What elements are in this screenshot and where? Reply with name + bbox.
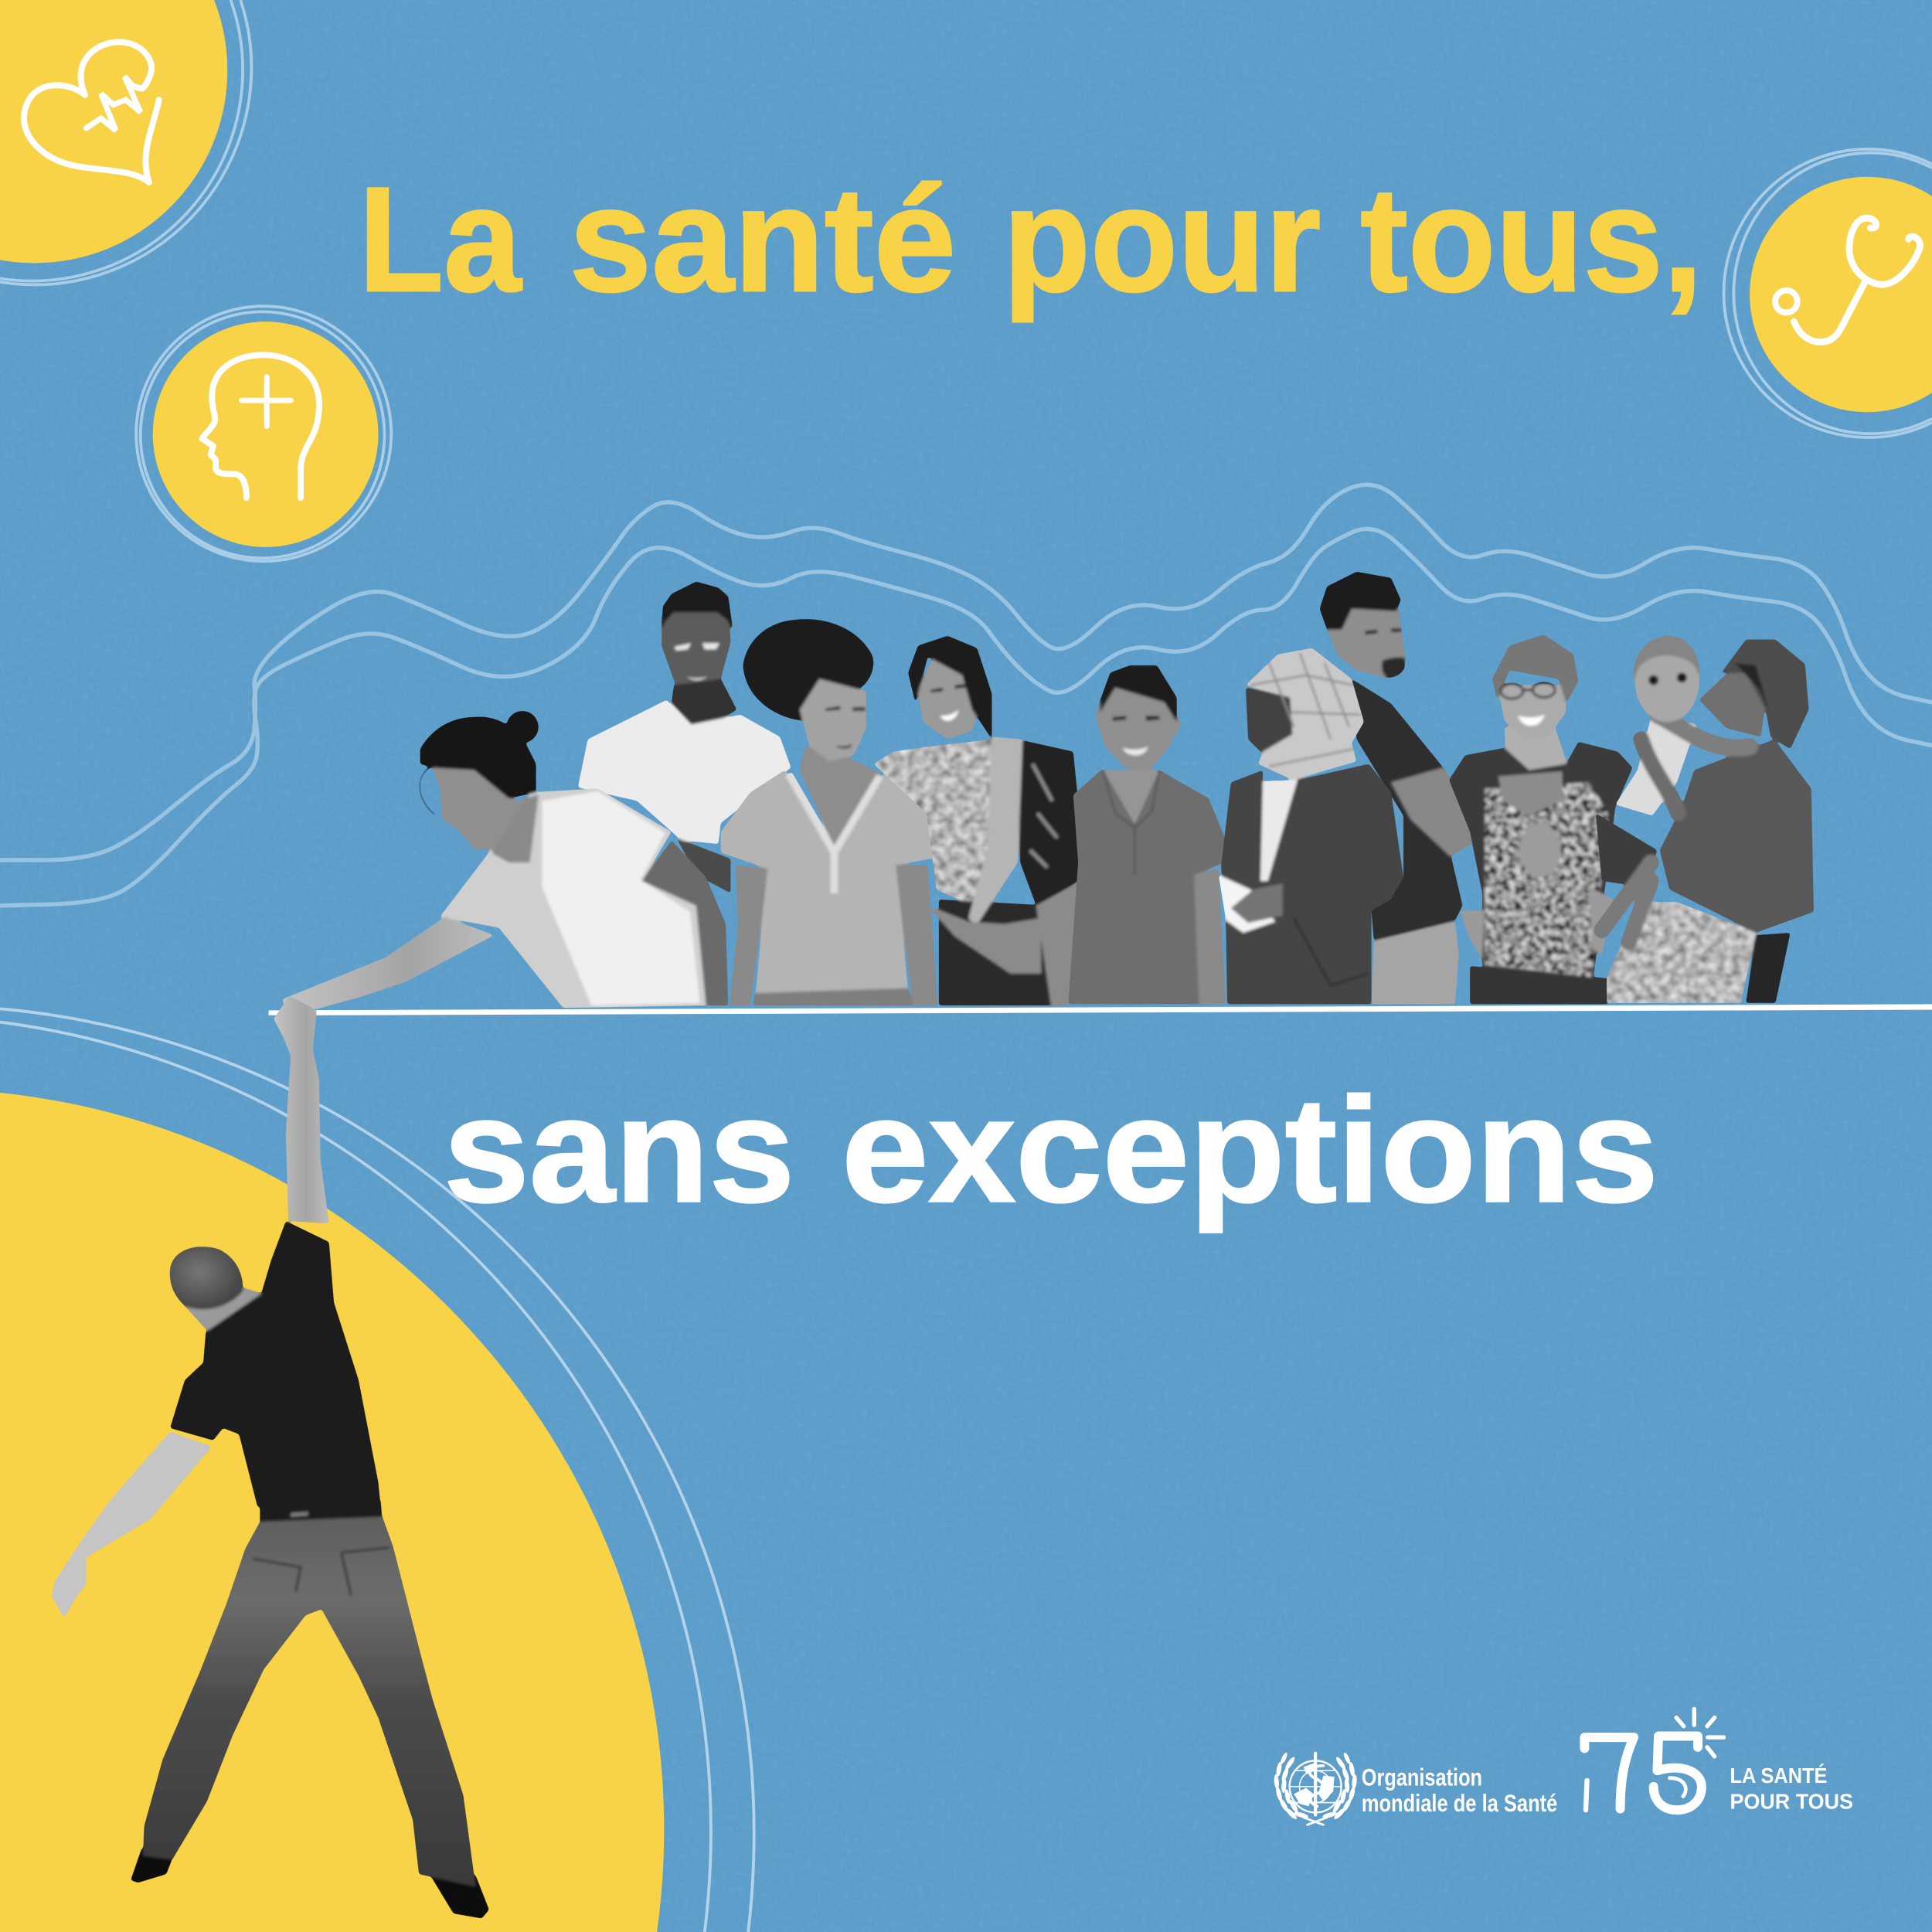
icon badge: stethoscope bbox=[1724, 149, 1932, 437]
logo text: La santé pour tous: LA SANTÉ bbox=[1730, 1764, 1827, 1787]
ledge: white line bbox=[269, 1004, 1932, 1015]
title: first line: pour bbox=[1003, 155, 1321, 322]
title: first line: santé bbox=[570, 155, 956, 322]
person: young woman with curly hair bbox=[721, 619, 945, 1005]
wavy line: upper bbox=[0, 485, 1932, 860]
person: man with arms crossed bbox=[1320, 572, 1480, 1004]
person: man hanging from the ledge bbox=[52, 995, 489, 1918]
person: woman in headscarf and blazer bbox=[1219, 648, 1403, 1004]
person: man leaning forward bbox=[282, 711, 728, 1010]
wavy line: lower bbox=[0, 529, 1932, 906]
icon badge: broken heart bbox=[0, 0, 251, 284]
logo text: Organisation mondiale de la Santé: mondiale de la Santé bbox=[1362, 1790, 1557, 1817]
logo text: La santé pour tous: POUR TOUS bbox=[1730, 1790, 1853, 1814]
logo: 75 with rays bbox=[1584, 1709, 1724, 1810]
title: second line: exceptions bbox=[842, 1066, 1658, 1233]
person: man in white T-shirt at the back bbox=[578, 582, 791, 893]
person: mother holding a baby bbox=[1596, 636, 1814, 1003]
icon badge: mental health head bbox=[136, 306, 391, 561]
person: older woman with glasses bbox=[1449, 634, 1633, 1004]
title: second line: sans bbox=[444, 1066, 794, 1233]
person: woman in patterned clothing with sash bbox=[873, 636, 1086, 1005]
title: first line: tous, bbox=[1360, 155, 1702, 322]
logo text: Organisation mondiale de la Santé: Organisation bbox=[1362, 1764, 1482, 1791]
logo: WHO emblem bbox=[1274, 1752, 1357, 1825]
title: first line: La bbox=[359, 155, 522, 322]
yellow circle: bottom left with rings bbox=[0, 1009, 754, 1932]
person: boy in polo shirt bbox=[1068, 665, 1233, 1004]
